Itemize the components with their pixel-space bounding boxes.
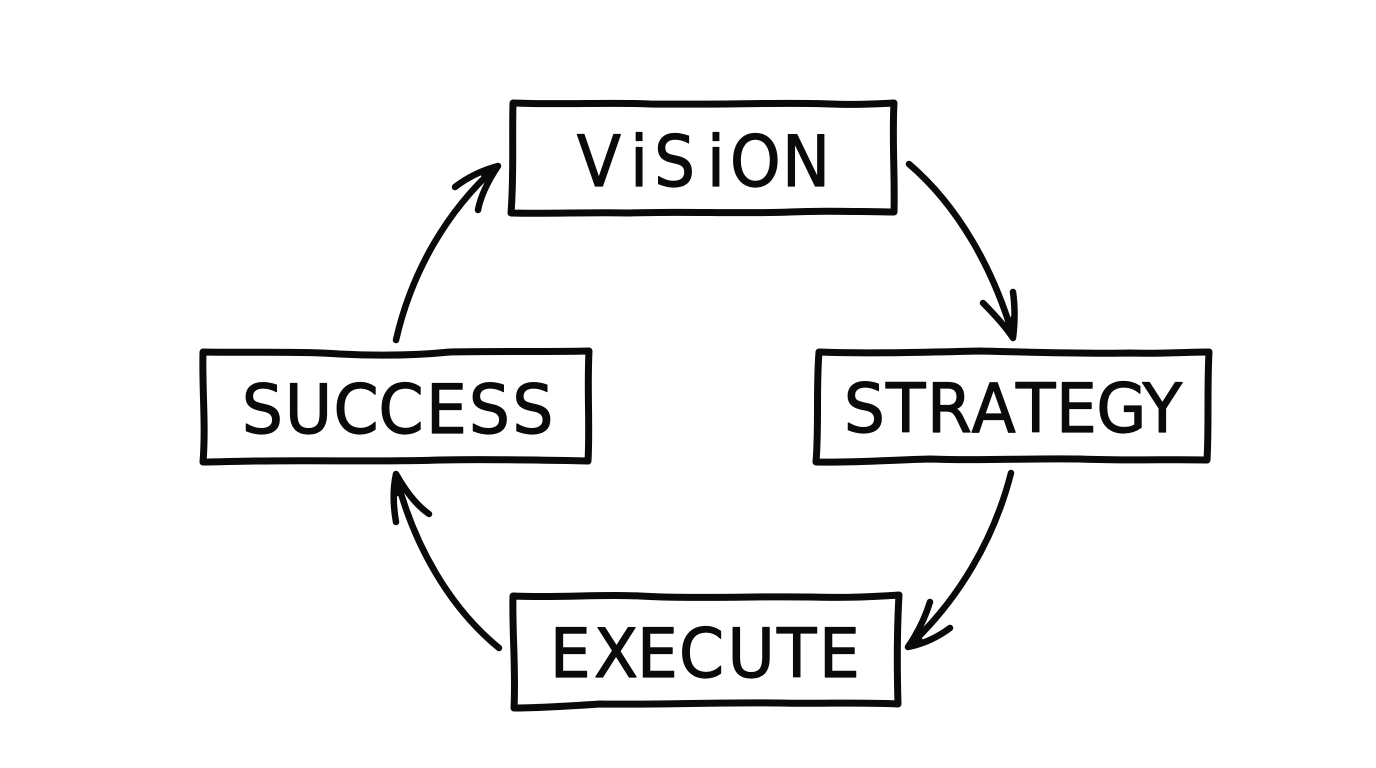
box: vision — [511, 103, 894, 213]
label: vision: ViSiON — [577, 121, 830, 203]
label: strategy: STRATEGY — [844, 368, 1183, 448]
arrow: vision to strategy — [909, 164, 1014, 338]
box: strategy — [816, 351, 1209, 462]
arrow: execute to success — [394, 474, 499, 648]
box: success — [203, 351, 589, 462]
label: execute: EXECUTE — [550, 613, 860, 693]
label: success: SUCCESS — [242, 369, 553, 449]
arrow: strategy to execute — [908, 473, 1011, 647]
arrow: success to vision — [396, 166, 498, 340]
box: execute — [513, 595, 899, 708]
